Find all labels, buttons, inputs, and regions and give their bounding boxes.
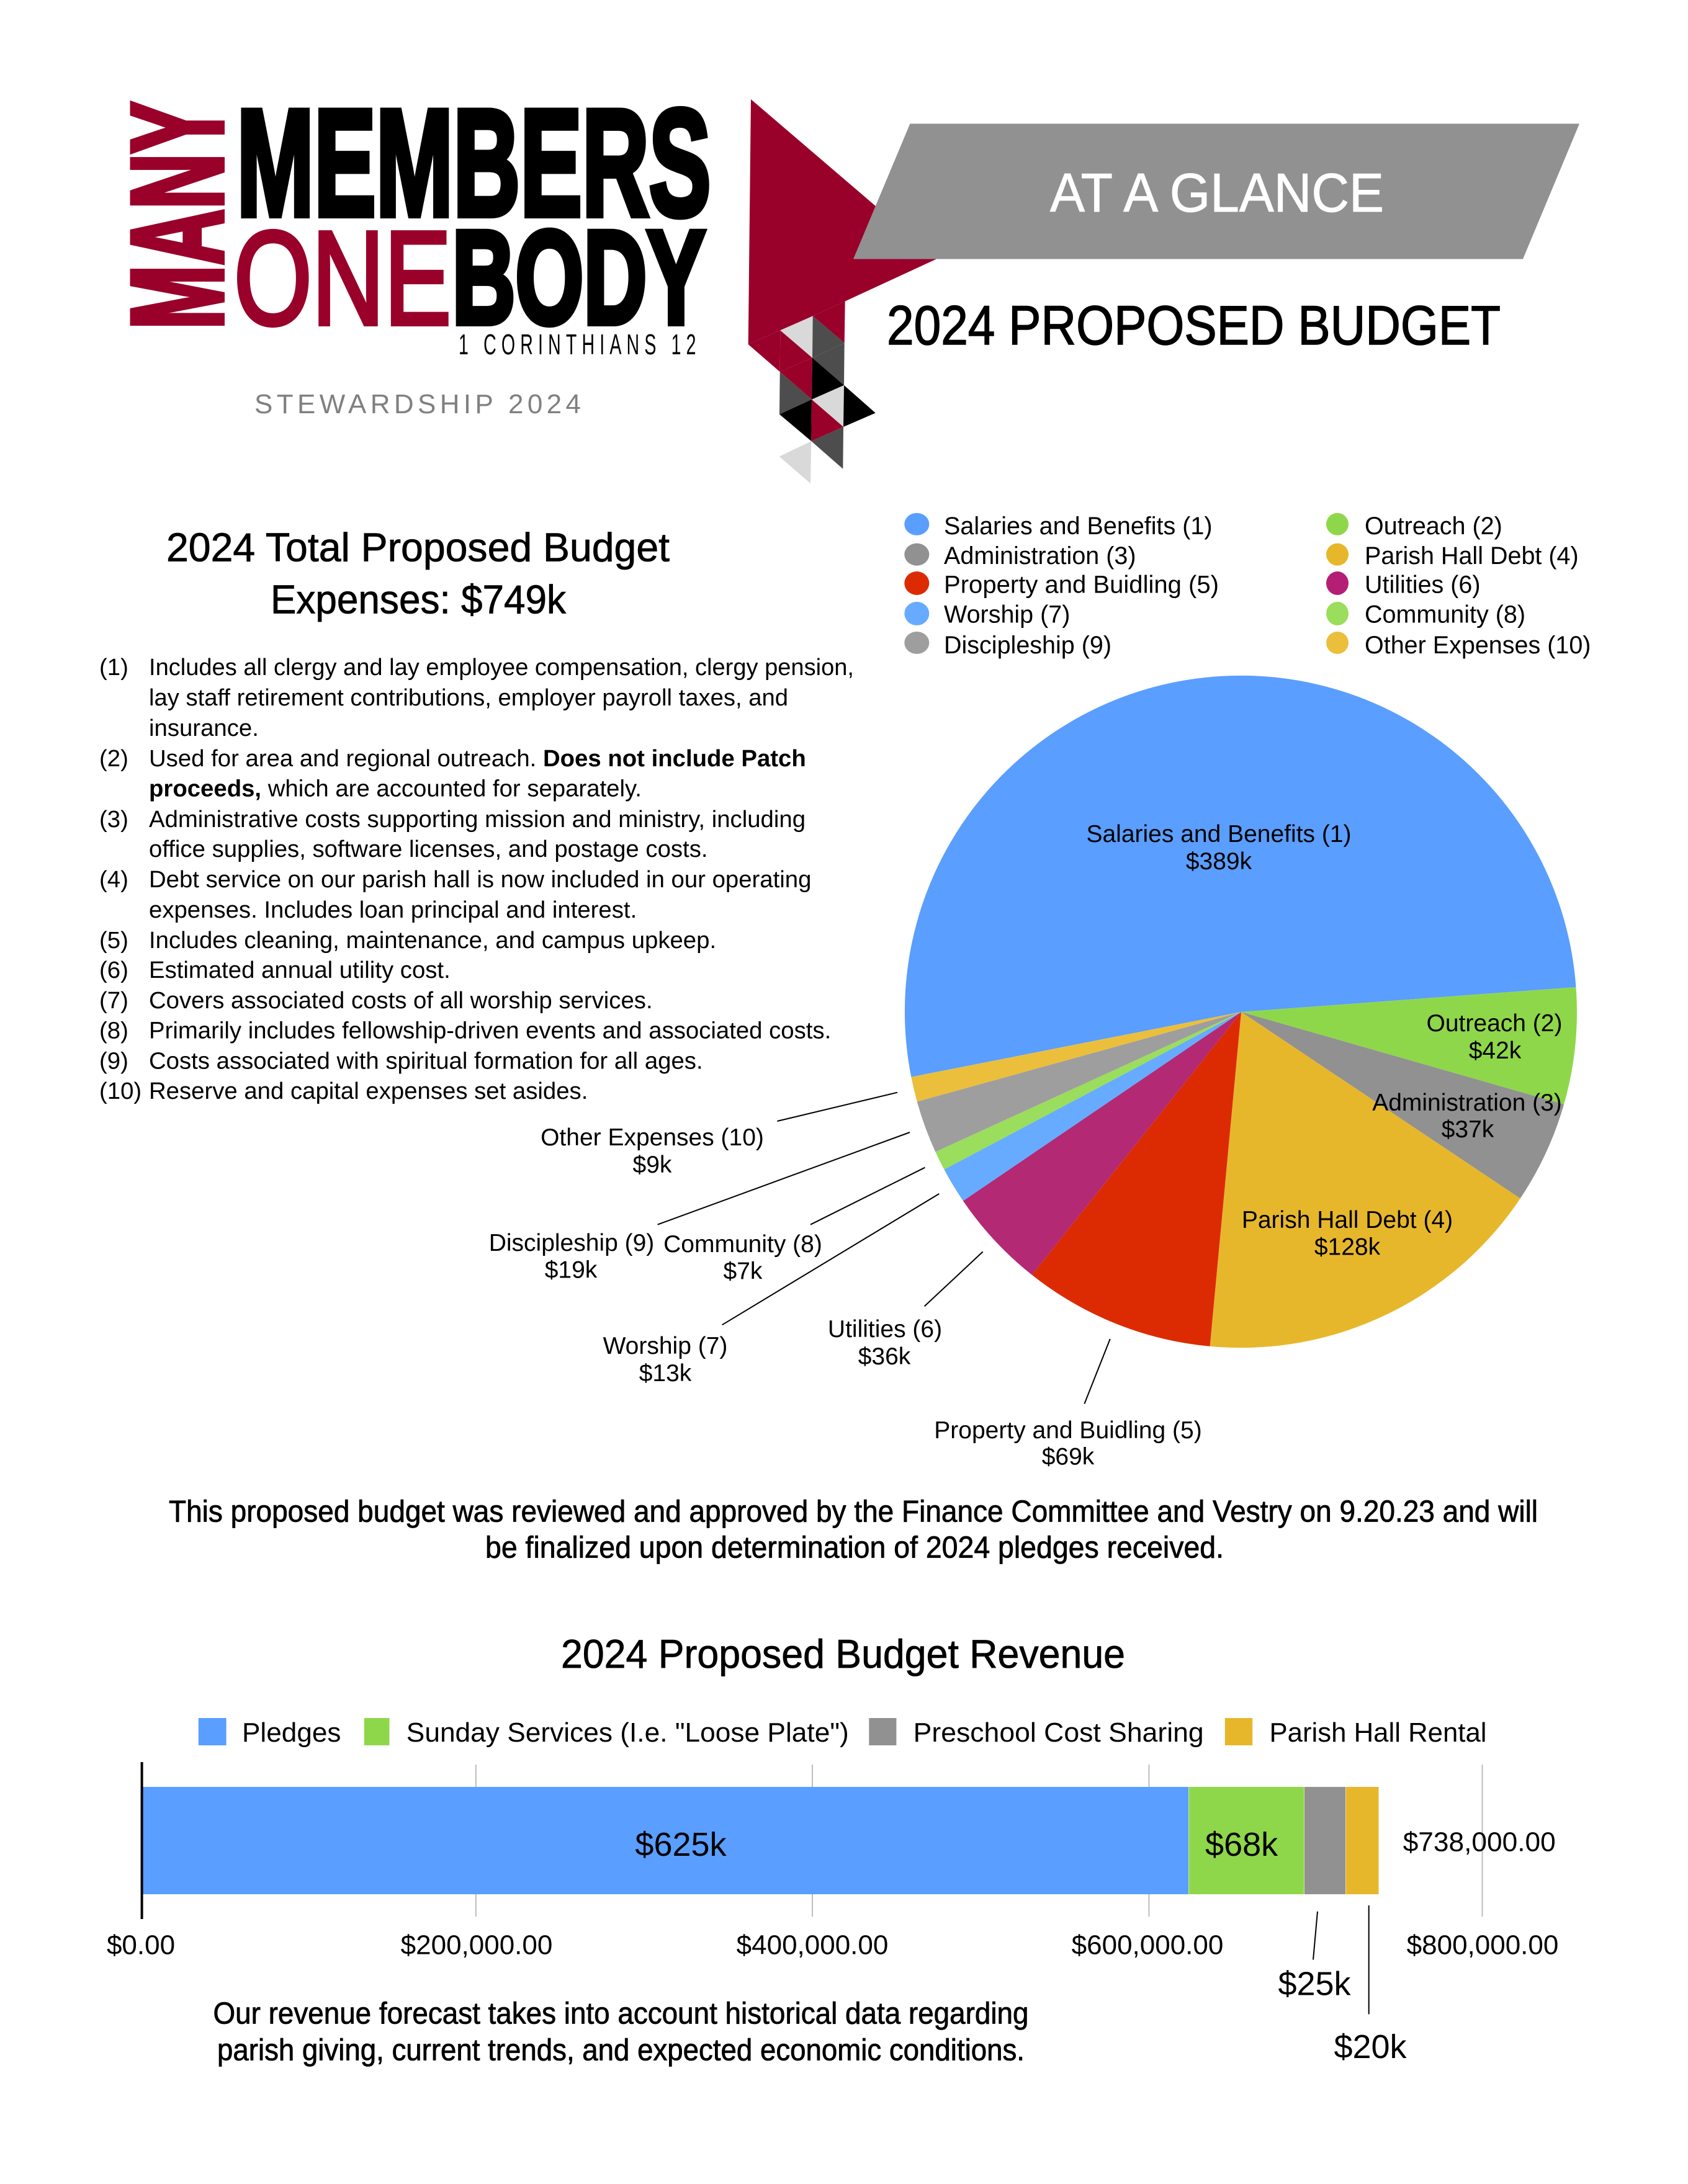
text block: expense notes: lay staff retirement contributions, employer payroll taxes, and bbox=[149, 684, 788, 711]
text block: expense notes: insurance. bbox=[149, 715, 259, 741]
text block: expense notes: (5) bbox=[99, 927, 128, 954]
bar segment: Parish Hall Rental bbox=[1345, 1787, 1379, 1894]
text block: expense notes: proceeds, which are accounted for separately. bbox=[149, 776, 642, 802]
pie labels: $36k bbox=[858, 1343, 911, 1370]
axis labels: $600,000.00 bbox=[1072, 1930, 1223, 1961]
legend: revenue sources: Parish Hall Rental bbox=[1270, 1717, 1487, 1748]
callout labels: $20k bbox=[1334, 2028, 1407, 2065]
text block: expense notes: expenses. Includes loan principal and interest. bbox=[149, 897, 637, 923]
bar segment: Pledges bbox=[142, 1787, 1188, 1894]
axis labels: $0.00 bbox=[107, 1930, 175, 1961]
text block: revenue forecast note: parish giving, current trends, and expected economic conditions. bbox=[217, 2033, 1025, 2067]
text block: expense notes: Costs associated with spiritual formation for all ages. bbox=[149, 1048, 703, 1075]
text block: expense notes: Includes cleaning, maintenance, and campus upkeep. bbox=[149, 927, 716, 954]
legend: expense categories: Discipleship (9) bbox=[944, 632, 1111, 659]
bar value labels bbox=[635, 1826, 1278, 1863]
legend: revenue sources bbox=[199, 1717, 1486, 1748]
text block: expense notes bbox=[99, 654, 854, 1104]
slice: Worship bbox=[944, 1012, 1241, 1201]
banner: At A Glance bbox=[853, 123, 1579, 259]
bar value labels: $625k bbox=[635, 1826, 727, 1863]
text block: expense notes: (2) bbox=[99, 745, 128, 772]
legend: expense categories: Parish Hall Debt (4) bbox=[1365, 542, 1579, 570]
pie labels: Salaries and Benefits (1) bbox=[1086, 821, 1352, 848]
heading: revenue: 2024 Proposed Budget Revenue bbox=[561, 1631, 1125, 1676]
pie labels: Outreach (2) bbox=[1427, 1010, 1562, 1037]
slice: Utilities bbox=[963, 1012, 1241, 1275]
legend: expense categories: Worship (7) bbox=[944, 601, 1070, 628]
pie labels bbox=[489, 821, 1562, 1470]
banner text: AT A GLANCE bbox=[1050, 162, 1384, 223]
pie labels: Community (8) bbox=[663, 1231, 822, 1258]
axis labels: $800,000.00 bbox=[1407, 1930, 1558, 1961]
text block: expense notes: (9) bbox=[99, 1048, 128, 1075]
text block: expense notes: (10) bbox=[99, 1078, 141, 1104]
bar segment: Preschool Cost Sharing bbox=[1304, 1787, 1345, 1894]
slice: Property and Building bbox=[1032, 1012, 1241, 1346]
text block: approval note bbox=[169, 1495, 1538, 1565]
heading: total proposed budget expenses: Expenses: $749k bbox=[271, 577, 566, 622]
logo word: ONE: ONE bbox=[234, 204, 451, 352]
legend: expense categories: Salaries and Benefits (1) bbox=[944, 512, 1213, 540]
pie labels: $128k bbox=[1314, 1234, 1381, 1261]
legend: revenue sources: Pledges bbox=[242, 1717, 341, 1748]
pie labels: $389k bbox=[1186, 848, 1252, 875]
pie labels: $13k bbox=[639, 1360, 692, 1387]
text block: expense notes: (3) bbox=[99, 806, 128, 833]
text block: expense notes: (4) bbox=[99, 866, 128, 893]
text block: expense notes: Primarily includes fellowship-driven events and associated costs. bbox=[149, 1018, 831, 1044]
icon: geometric triangle ornament bbox=[748, 99, 937, 483]
text block: expense notes: (6) bbox=[99, 957, 128, 983]
heading: total proposed budget expenses bbox=[166, 525, 670, 622]
pie labels: Other Expenses (10) bbox=[541, 1124, 764, 1151]
legend: expense categories: Community (8) bbox=[1365, 601, 1525, 628]
bar segment: Sunday Services bbox=[1189, 1787, 1304, 1894]
legend: expense categories bbox=[904, 512, 1591, 659]
logo scripture reference: 1 CORINTHIANS 12 bbox=[459, 329, 696, 361]
pie labels: Parish Hall Debt (4) bbox=[1242, 1207, 1453, 1233]
text block: expense notes: Reserve and capital expenses set asides. bbox=[149, 1078, 588, 1104]
pie labels: Property and Buidling (5) bbox=[934, 1417, 1202, 1444]
pie labels: $7k bbox=[724, 1258, 763, 1285]
text block: approval note: This proposed budget was reviewed and approved by the Finance Committee and Vestry on 9.20.23 and will bbox=[169, 1495, 1538, 1529]
leader lines bbox=[1313, 1905, 1369, 2014]
text block: expense notes: Used for area and regional outreach. Does not include Patch bbox=[149, 745, 806, 772]
pie labels: $42k bbox=[1469, 1037, 1522, 1064]
bar total label: $738,000.00 bbox=[1403, 1827, 1556, 1858]
slice: Other Expenses bbox=[911, 1012, 1241, 1102]
callout labels bbox=[1278, 1966, 1407, 2065]
text block: expense notes: Estimated annual utility cost. bbox=[149, 957, 451, 983]
heading: total proposed budget expenses: 2024 Total Proposed Budget bbox=[166, 525, 670, 570]
pie labels: Discipleship (9) bbox=[489, 1230, 654, 1256]
text block: expense notes: Debt service on our parish hall is now included in our operating bbox=[149, 866, 811, 893]
text block: expense notes: (7) bbox=[99, 987, 128, 1014]
pie labels: $9k bbox=[633, 1152, 672, 1178]
leader lines for pie labels bbox=[658, 1093, 1110, 1403]
text block: expense notes: (1) bbox=[99, 654, 128, 681]
slice: Parish Hall Debt bbox=[1210, 1012, 1520, 1348]
pie chart: expenses by category bbox=[905, 676, 1577, 1348]
slice: Outreach bbox=[1241, 987, 1577, 1104]
text block: revenue forecast note: Our revenue forecast takes into account historical data regarding bbox=[213, 1997, 1029, 2031]
grid lines bbox=[476, 1765, 1482, 1917]
text block: expense notes: (8) bbox=[99, 1018, 128, 1044]
slice: Community bbox=[935, 1012, 1241, 1170]
pie labels: Utilities (6) bbox=[828, 1316, 942, 1343]
text block: expense notes: Administrative costs supporting mission and ministry, including bbox=[149, 806, 806, 833]
axis labels bbox=[107, 1930, 1558, 1961]
legend: expense categories: Administration (3) bbox=[944, 542, 1136, 570]
legend: expense categories: Property and Buidling (5) bbox=[944, 571, 1219, 598]
legend: expense categories: Outreach (2) bbox=[1365, 512, 1502, 540]
logo: Many Members One Body bbox=[104, 78, 711, 419]
bar chart: revenue stacked bar bbox=[107, 1762, 1558, 2065]
legend: revenue sources: Sunday Services (I.e. "Loose Plate") bbox=[406, 1717, 849, 1748]
legend: expense categories: Other Expenses (10) bbox=[1365, 632, 1591, 659]
pie labels: Worship (7) bbox=[603, 1333, 727, 1359]
slice: Salaries and Benefits bbox=[905, 676, 1576, 1077]
text block: revenue forecast note bbox=[213, 1997, 1029, 2067]
axis labels: $200,000.00 bbox=[401, 1930, 552, 1961]
logo word: MEMBERS: MEMBERS bbox=[237, 78, 711, 248]
pie labels: $19k bbox=[545, 1257, 598, 1283]
pie labels: $69k bbox=[1042, 1444, 1095, 1470]
axis labels: $400,000.00 bbox=[737, 1930, 888, 1961]
logo tagline: Stewardship 2024: STEWARDSHIP 2024 bbox=[254, 389, 581, 419]
text block: approval note: be finalized upon determination of 2024 pledges received. bbox=[485, 1531, 1224, 1565]
pie labels: Administration (3) bbox=[1372, 1090, 1562, 1116]
bar value labels: $68k bbox=[1205, 1826, 1278, 1863]
legend: revenue sources: Preschool Cost Sharing bbox=[914, 1717, 1204, 1748]
text block: expense notes: office supplies, software licenses, and postage costs. bbox=[149, 836, 708, 862]
text block: expense notes: Covers associated costs of all worship services. bbox=[149, 987, 653, 1014]
text block: expense notes: Includes all clergy and lay employee compensation, clergy pension, bbox=[149, 654, 854, 681]
axis line bbox=[141, 1762, 143, 1919]
heading: 2024 Proposed Budget: 2024 PROPOSED BUDGET bbox=[887, 294, 1501, 356]
callout labels: $25k bbox=[1278, 1966, 1352, 2003]
legend: expense categories: Utilities (6) bbox=[1365, 571, 1481, 598]
slice: Discipleship bbox=[917, 1012, 1241, 1152]
pie labels: $37k bbox=[1442, 1116, 1494, 1143]
logo word: BODY: BODY bbox=[452, 204, 705, 352]
slice: Administration bbox=[1241, 1012, 1564, 1199]
